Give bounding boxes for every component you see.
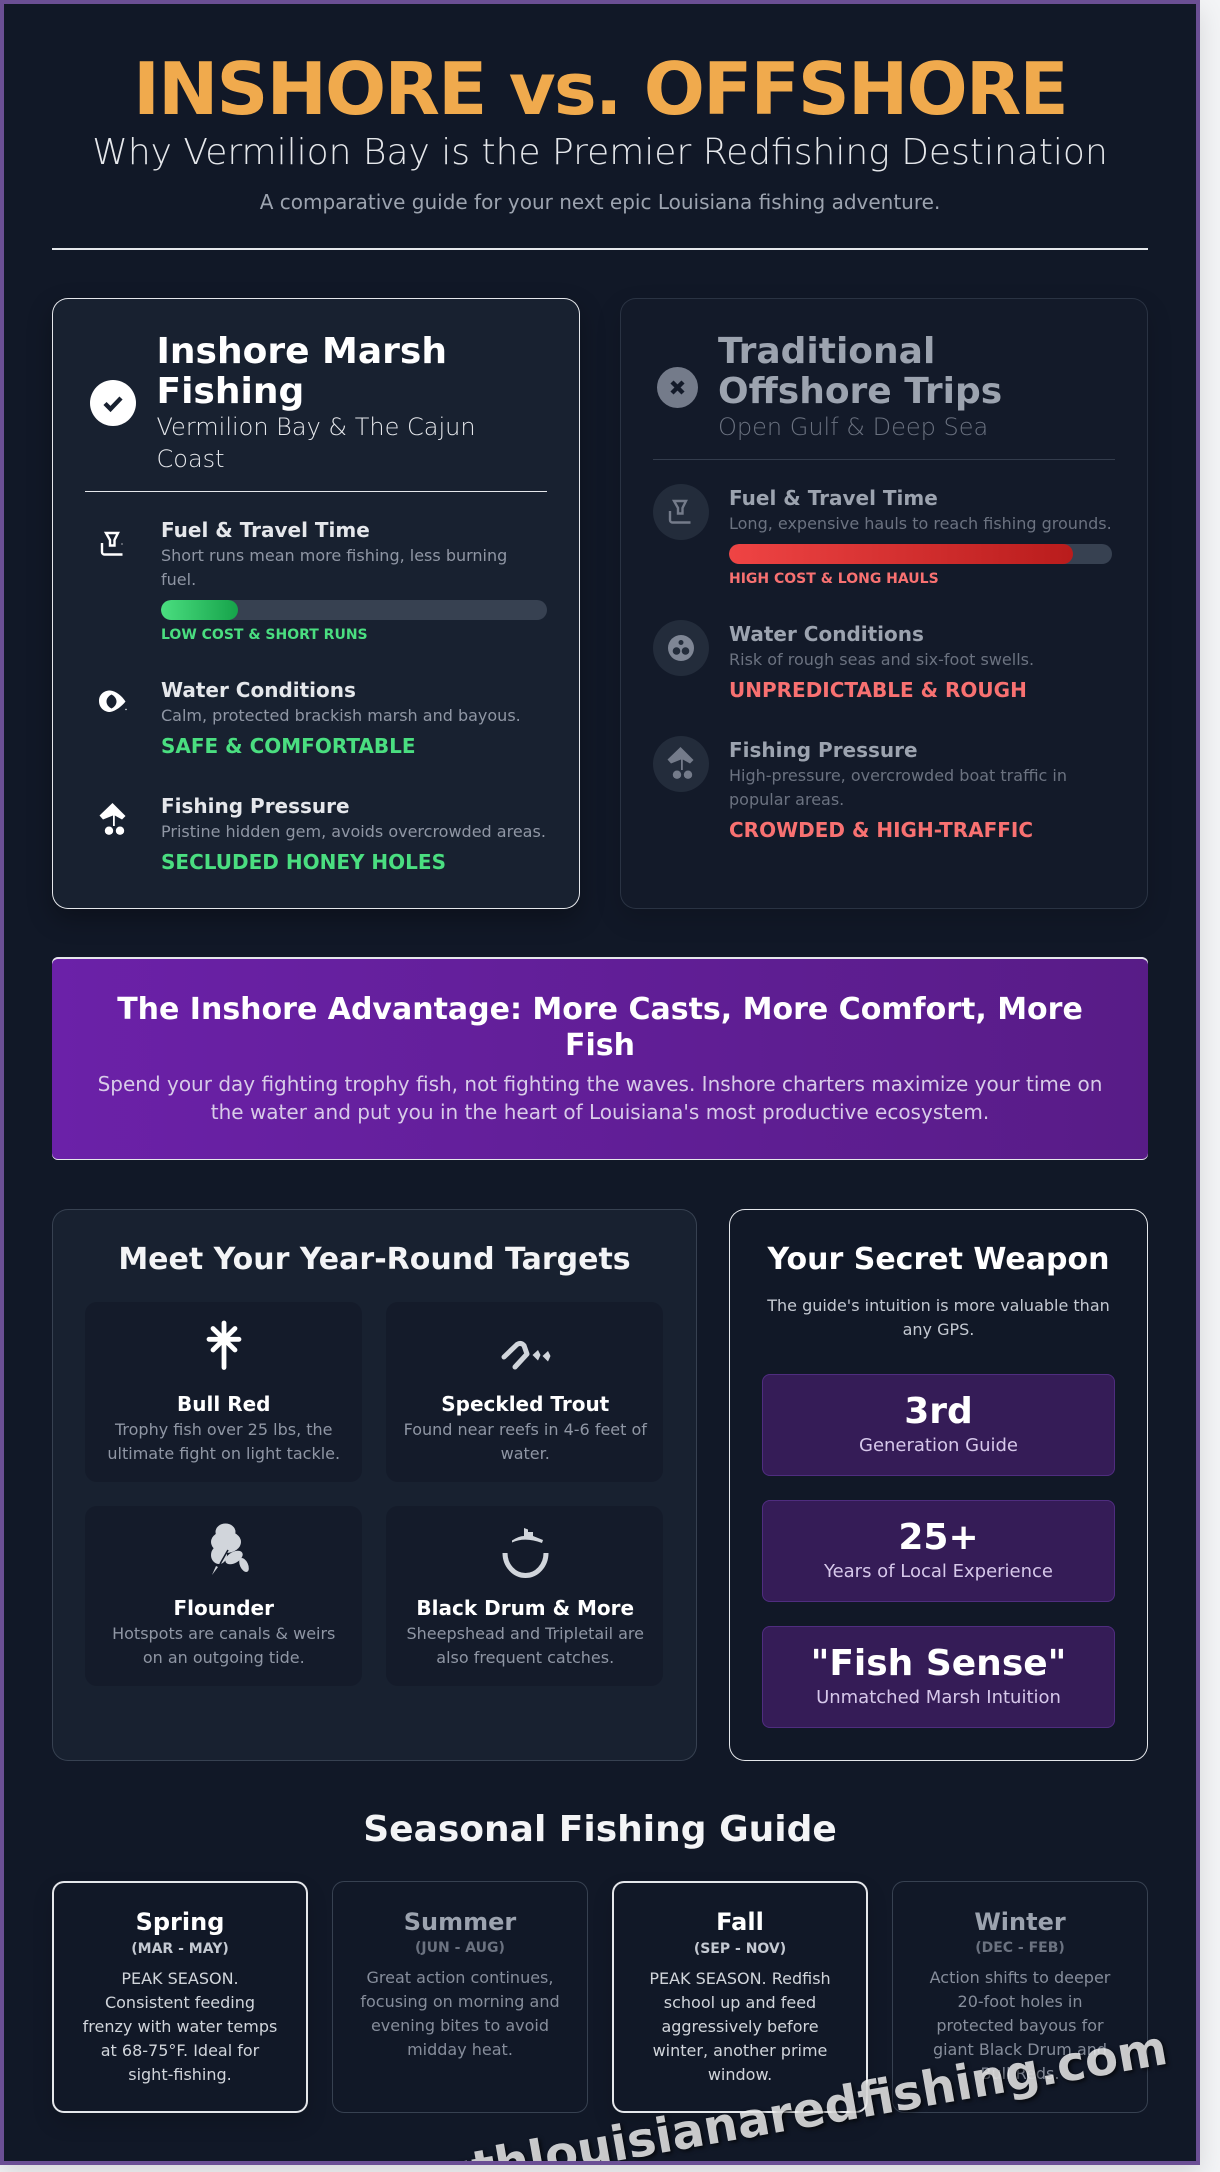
fall description: PEAK SEASON. Redfish bbox=[649, 1969, 831, 1988]
flounder name: Flounder bbox=[174, 1596, 274, 1620]
spring description: Consistent feeding bbox=[105, 1993, 255, 2012]
banner heading bbox=[117, 992, 1083, 1063]
summer description: midday heat. bbox=[407, 2040, 513, 2059]
offshore heading: Offshore Trips bbox=[718, 371, 1002, 412]
summer name: Summer bbox=[404, 1908, 516, 1936]
secret weapon text: The guide's intuition is more valuable than bbox=[767, 1296, 1110, 1315]
season: summer bbox=[332, 1881, 588, 2113]
stat: years bbox=[762, 1500, 1115, 1602]
speckled trout description bbox=[404, 1420, 648, 1463]
pressure description bbox=[729, 766, 1067, 809]
panel: traditional offshore trips bbox=[620, 298, 1148, 909]
stat: fish sense bbox=[762, 1626, 1115, 1728]
icon: water bbox=[99, 690, 127, 712]
icon: bull red bbox=[206, 1320, 242, 1370]
pressure title: Fishing Pressure bbox=[729, 738, 918, 762]
fish sense label: Unmatched Marsh Intuition bbox=[816, 1687, 1061, 1708]
target: speckled trout bbox=[386, 1302, 663, 1482]
banner heading: Fish bbox=[565, 1028, 635, 1063]
icon: speckled trout bbox=[502, 1340, 550, 1370]
panel: secret weapon bbox=[729, 1209, 1148, 1761]
target: flounder bbox=[85, 1506, 362, 1686]
winter description bbox=[930, 1968, 1110, 2083]
panel: inshore marsh fishing bbox=[52, 298, 580, 909]
secret weapon text: any GPS. bbox=[903, 1320, 974, 1339]
icon: flounder bbox=[211, 1524, 249, 1575]
icon: pressure bbox=[100, 803, 126, 835]
target: black drum bbox=[386, 1506, 663, 1686]
seasonal guide heading: Seasonal Fishing Guide bbox=[363, 1809, 837, 1850]
secret weapon text bbox=[767, 1296, 1110, 1339]
icon: check circle bbox=[90, 380, 136, 426]
inshore heading: Fishing bbox=[156, 371, 304, 412]
fall description: school up and feed bbox=[664, 1993, 816, 2012]
winter description: Bull Reds. bbox=[981, 2064, 1059, 2083]
summer description: Great action continues, bbox=[367, 1968, 553, 1987]
header rule bbox=[52, 248, 1148, 250]
offshore heading bbox=[718, 331, 1002, 412]
fuel bar fill bbox=[161, 600, 238, 620]
bull red description: ultimate fight on light tackle. bbox=[107, 1444, 340, 1463]
summer months: (JUN - AUG) bbox=[415, 1940, 505, 1956]
bull red name: Bull Red bbox=[177, 1392, 270, 1416]
water description: Calm, protected brackish marsh and bayous. bbox=[161, 706, 521, 725]
fall description bbox=[649, 1969, 831, 2084]
speckled trout name: Speckled Trout bbox=[441, 1392, 609, 1416]
years label: Years of Local Experience bbox=[824, 1561, 1053, 1582]
icon: black drum bbox=[502, 1528, 548, 1578]
season: spring bbox=[52, 1881, 308, 2113]
water title: Water Conditions bbox=[729, 622, 924, 646]
banner text: the water and put you in the heart of Louisiana's most productive ecosystem. bbox=[211, 1100, 989, 1124]
fall name: Fall bbox=[716, 1908, 764, 1936]
inshore heading bbox=[156, 331, 447, 412]
pressure description: High-pressure, overcrowded boat traffic in bbox=[729, 766, 1067, 785]
winter description: 20-foot holes in bbox=[958, 1992, 1082, 2011]
fuel bar fill bbox=[729, 544, 1073, 564]
banner text: Spend your day fighting trophy fish, not fighting the waves. Inshore charters maximize your time on bbox=[98, 1072, 1102, 1096]
panel: year-round targets bbox=[52, 1209, 697, 1761]
targets heading: Meet Your Year-Round Targets bbox=[118, 1242, 631, 1277]
pressure description: popular areas. bbox=[729, 790, 844, 809]
header bbox=[52, 47, 1148, 250]
fall description: aggressively before bbox=[661, 2017, 819, 2036]
fuel verdict: HIGH COST & LONG HAULS bbox=[729, 571, 939, 587]
winter description: protected bayous for bbox=[936, 2016, 1104, 2035]
fuel description: Long, expensive hauls to reach fishing grounds. bbox=[729, 514, 1112, 533]
flounder description bbox=[112, 1624, 335, 1667]
bull red description: Trophy fish over 25 lbs, the bbox=[115, 1420, 332, 1439]
icon: pressure bbox=[653, 736, 709, 792]
fuel verdict: LOW COST & SHORT RUNS bbox=[161, 627, 368, 643]
pressure verdict: SECLUDED HONEY HOLES bbox=[161, 850, 446, 874]
winter months: (DEC - FEB) bbox=[975, 1940, 1065, 1956]
speckled trout description: Found near reefs in 4-6 feet of bbox=[404, 1420, 647, 1439]
black drum description: Sheepshead and Tripletail are bbox=[406, 1624, 644, 1643]
inshore location bbox=[156, 413, 476, 473]
inshore location: Vermilion Bay & The Cajun bbox=[156, 413, 476, 441]
generation label: Generation Guide bbox=[859, 1435, 1018, 1456]
icon: water bbox=[653, 620, 709, 676]
fuel title: Fuel & Travel Time bbox=[161, 518, 370, 542]
spring description: PEAK SEASON. bbox=[121, 1969, 239, 1988]
summer description: evening bites to avoid bbox=[371, 2016, 549, 2035]
fall months: (SEP - NOV) bbox=[694, 1941, 786, 1957]
spring months: (MAR - MAY) bbox=[131, 1941, 229, 1957]
fall description: winter, another prime bbox=[653, 2041, 827, 2060]
fuel description bbox=[161, 546, 507, 589]
inshore heading: Inshore Marsh bbox=[156, 331, 447, 372]
spring description bbox=[83, 1969, 277, 2084]
fuel cost bar bbox=[729, 544, 1112, 564]
fish sense phrase: "Fish Sense" bbox=[811, 1643, 1066, 1684]
subtitle: Why Vermilion Bay is the Premier Redfishing Destination bbox=[92, 132, 1108, 173]
black drum name: Black Drum & More bbox=[416, 1596, 634, 1620]
winter description: Action shifts to deeper bbox=[930, 1968, 1110, 1987]
water verdict: UNPREDICTABLE & ROUGH bbox=[729, 678, 1027, 702]
black drum description bbox=[406, 1624, 644, 1667]
black drum description: also frequent catches. bbox=[436, 1648, 614, 1667]
banner: inshore advantage bbox=[52, 957, 1148, 1160]
offshore location: Open Gulf & Deep Sea bbox=[718, 413, 988, 441]
icon: fuel bbox=[100, 532, 123, 556]
fuel cost bar bbox=[161, 600, 547, 620]
winter description: giant Black Drum and bbox=[933, 2040, 1107, 2059]
spring description: frenzy with water temps bbox=[83, 2017, 277, 2036]
summer description bbox=[360, 1968, 560, 2059]
generation number: 3rd bbox=[904, 1391, 973, 1432]
season: winter bbox=[892, 1881, 1148, 2113]
icon: fuel bbox=[653, 484, 709, 540]
spring description: sight-fishing. bbox=[128, 2065, 232, 2084]
fuel title: Fuel & Travel Time bbox=[729, 486, 938, 510]
season: fall bbox=[612, 1881, 868, 2113]
banner heading: The Inshore Advantage: More Casts, More Comfort, More bbox=[117, 992, 1083, 1027]
years number: 25+ bbox=[898, 1517, 979, 1558]
fuel description: Short runs mean more fishing, less burning bbox=[161, 546, 507, 565]
bull red description bbox=[107, 1420, 340, 1463]
water verdict: SAFE & COMFORTABLE bbox=[161, 734, 416, 758]
flounder description: on an outgoing tide. bbox=[143, 1648, 305, 1667]
fall description: window. bbox=[708, 2065, 772, 2084]
summer description: focusing on morning and bbox=[360, 1992, 560, 2011]
tagline: A comparative guide for your next epic Louisiana fishing adventure. bbox=[260, 190, 940, 214]
target: bull red bbox=[85, 1302, 362, 1482]
offshore heading: Traditional bbox=[718, 331, 935, 372]
winter name: Winter bbox=[974, 1908, 1066, 1936]
offshore rule bbox=[653, 459, 1115, 460]
spring name: Spring bbox=[136, 1908, 224, 1936]
inshore rule bbox=[85, 491, 547, 492]
pressure verdict: CROWDED & HIGH-TRAFFIC bbox=[729, 818, 1033, 842]
spring description: at 68-75°F. Ideal for bbox=[101, 2041, 259, 2060]
stat: generation bbox=[762, 1374, 1115, 1476]
title: INSHORE vs. OFFSHORE bbox=[133, 47, 1067, 131]
secret weapon heading: Your Secret Weapon bbox=[768, 1242, 1109, 1277]
water title: Water Conditions bbox=[161, 678, 356, 702]
banner text bbox=[98, 1072, 1102, 1124]
flounder description: Hotspots are canals & weirs bbox=[112, 1624, 335, 1643]
icon: x circle bbox=[657, 367, 698, 408]
fuel description: fuel. bbox=[161, 570, 196, 589]
pressure title: Fishing Pressure bbox=[161, 794, 350, 818]
speckled trout description: water. bbox=[501, 1444, 550, 1463]
inshore location: Coast bbox=[156, 445, 225, 473]
water description: Risk of rough seas and six-foot swells. bbox=[729, 650, 1034, 669]
pressure description: Pristine hidden gem, avoids overcrowded areas. bbox=[161, 822, 546, 841]
